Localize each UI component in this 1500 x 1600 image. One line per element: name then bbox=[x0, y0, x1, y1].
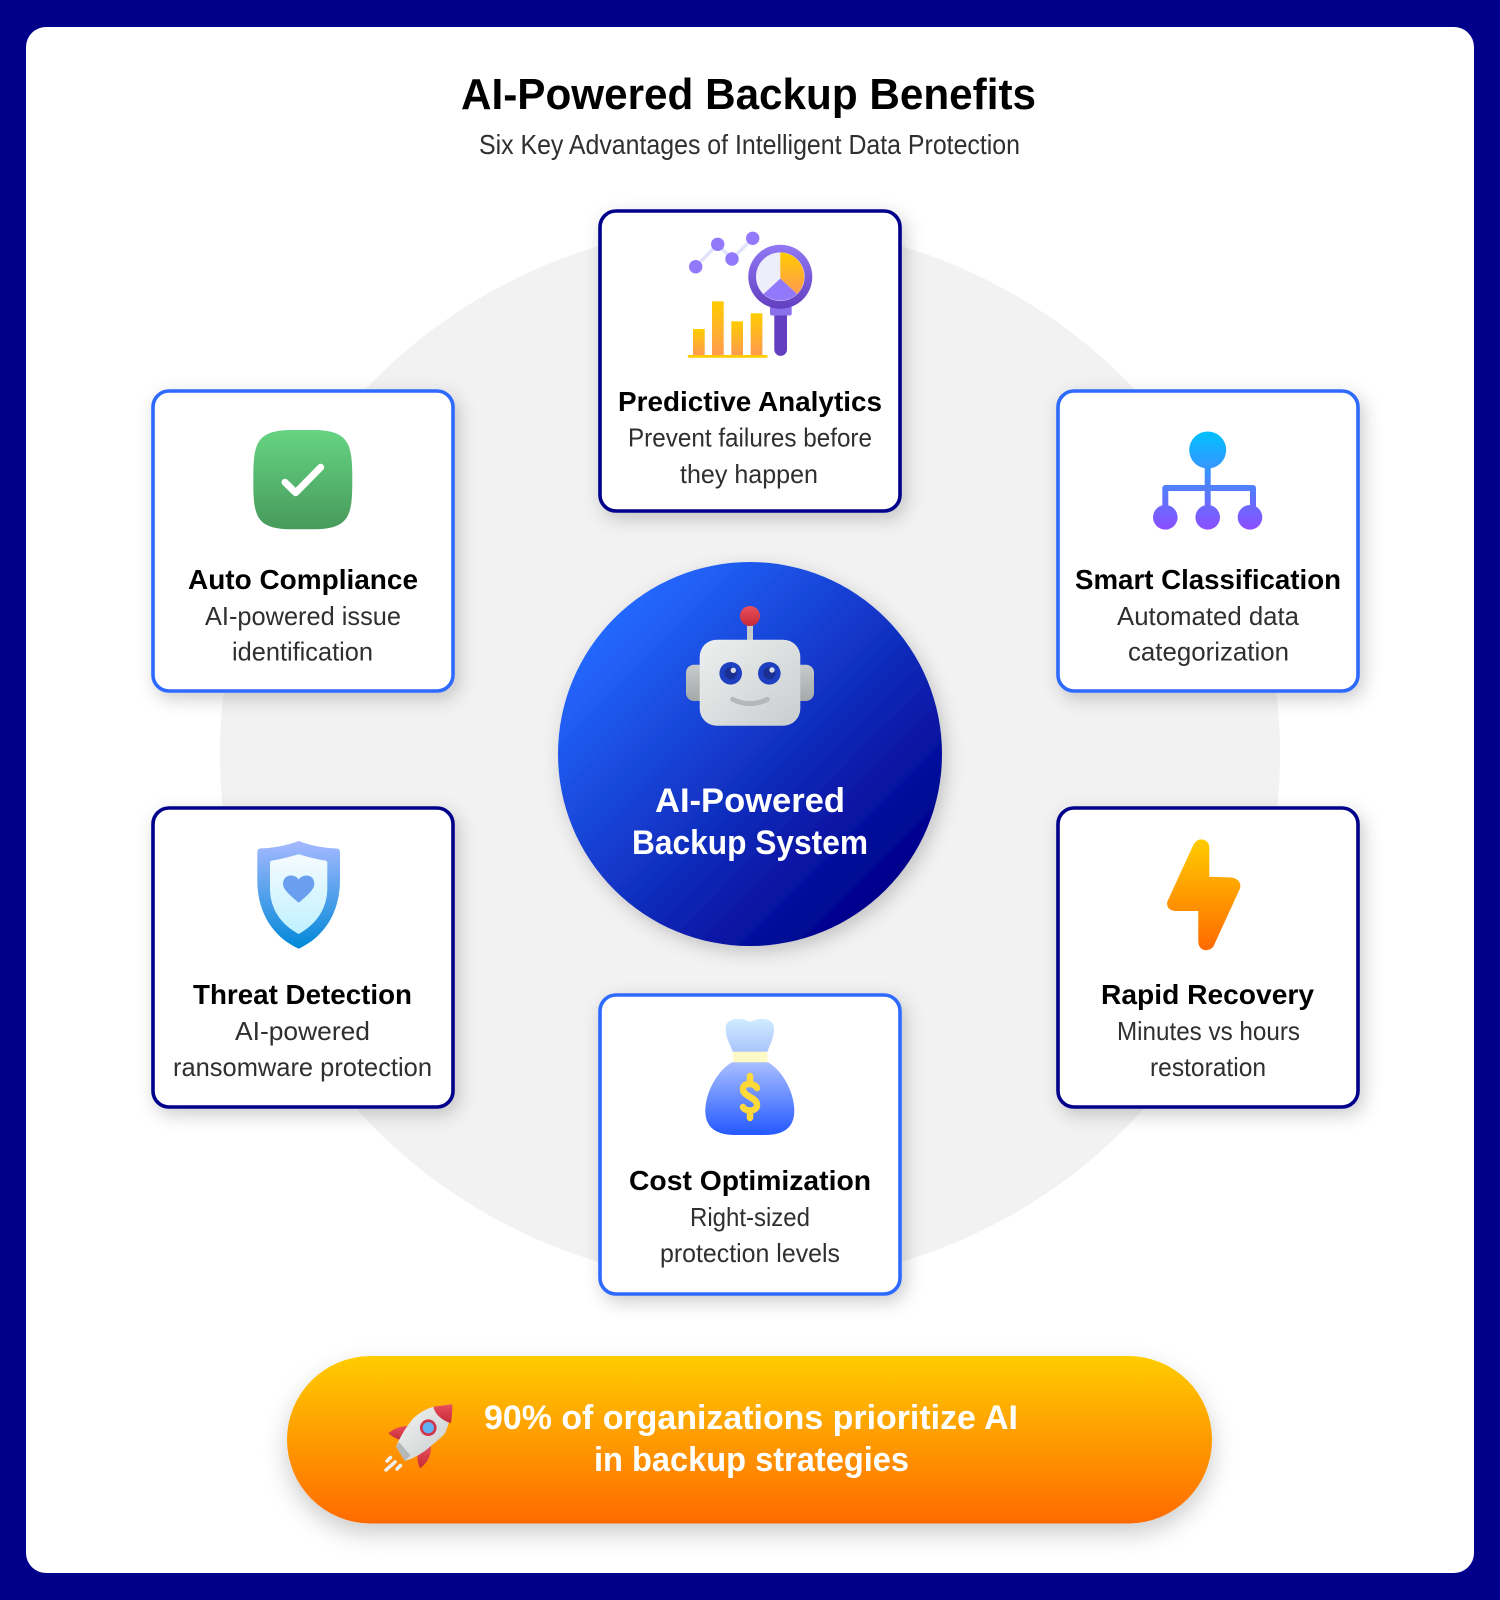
card text bbox=[173, 1016, 432, 1082]
card text bbox=[205, 601, 401, 666]
panel: cost optimization bbox=[600, 995, 900, 1294]
card text: Minutes vs hours bbox=[1117, 1016, 1300, 1046]
panel: auto compliance bbox=[153, 391, 453, 691]
card heading: Cost Optimization bbox=[629, 1165, 871, 1196]
card text bbox=[628, 422, 872, 489]
card text: AI-powered issue bbox=[205, 601, 401, 631]
card heading: Smart Classification bbox=[1075, 564, 1341, 595]
callout text bbox=[484, 1399, 1018, 1479]
card text: Right-sized bbox=[690, 1202, 810, 1232]
card heading: Rapid Recovery bbox=[1101, 979, 1314, 1010]
card text: protection levels bbox=[660, 1238, 840, 1268]
icon: lightning bolt bbox=[1167, 839, 1240, 950]
icon: hierarchy tree bbox=[1153, 432, 1262, 530]
card heading: Auto Compliance bbox=[188, 564, 418, 595]
card text: Prevent failures before bbox=[628, 422, 872, 452]
card text: AI-powered bbox=[235, 1016, 370, 1046]
hub label: AI-Powered bbox=[655, 782, 845, 820]
card text bbox=[1117, 1016, 1300, 1082]
card heading: Threat Detection bbox=[193, 979, 412, 1010]
subtitle: Six Key Advantages of Intelligent Data Protection bbox=[479, 129, 1020, 160]
card text: ransomware protection bbox=[173, 1052, 432, 1082]
central hub circle bbox=[558, 562, 942, 946]
panel: threat detection bbox=[153, 808, 453, 1107]
icon: analytics magnifier and bars bbox=[688, 232, 812, 358]
title: AI-Powered Backup Benefits bbox=[461, 70, 1036, 119]
card text: they happen bbox=[680, 459, 818, 489]
card text: restoration bbox=[1150, 1052, 1266, 1082]
card text bbox=[1117, 601, 1300, 666]
icon: robot bbox=[686, 606, 814, 726]
card text: identification bbox=[232, 636, 373, 666]
panel: smart classification bbox=[1058, 391, 1358, 691]
card heading: Predictive Analytics bbox=[618, 386, 882, 417]
callout text: in backup strategies bbox=[594, 1441, 909, 1479]
icon: green check bbox=[253, 430, 352, 529]
panel: rapid recovery bbox=[1058, 808, 1358, 1107]
panel: predictive analytics bbox=[600, 211, 900, 511]
callout banner bbox=[287, 1356, 1212, 1524]
card text: categorization bbox=[1128, 636, 1289, 666]
icon: money bag bbox=[705, 1019, 794, 1135]
hub label bbox=[632, 782, 868, 862]
card text bbox=[660, 1202, 840, 1268]
icon: shield with heart bbox=[257, 841, 340, 949]
hub label: Backup System bbox=[632, 824, 868, 862]
background circle bbox=[220, 224, 1280, 1284]
icon: rocket bbox=[386, 1404, 452, 1470]
card text: Automated data bbox=[1117, 601, 1300, 631]
callout text: 90% of organizations prioritize AI bbox=[484, 1399, 1018, 1437]
